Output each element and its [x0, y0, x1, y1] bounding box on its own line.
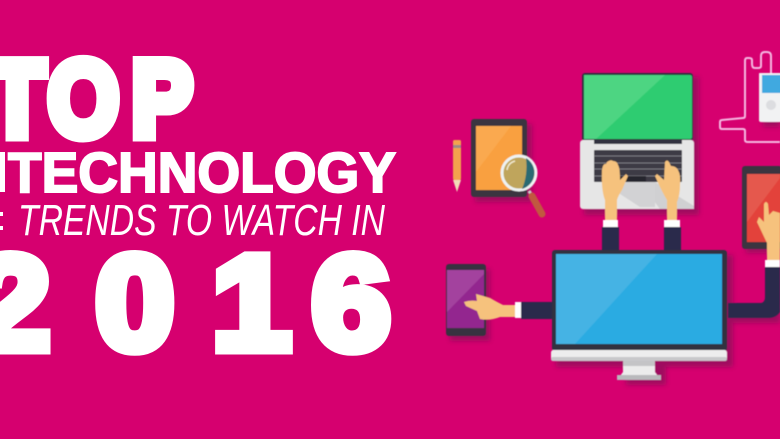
cropped letter fragments at left edge	[0, 152, 5, 230]
laptop	[580, 73, 694, 251]
mp3 player	[759, 73, 780, 122]
illustration shadows	[450, 77, 780, 385]
subtitle: trends to watch in: TRENDS TO WATCH IN	[18, 196, 385, 245]
keyboard	[594, 150, 682, 182]
title: TECHNOLOGY: TECHNOLOGY	[8, 141, 396, 205]
illustration: connected devices	[446, 52, 780, 385]
right arm reaching up to red tablet	[728, 202, 780, 318]
orange tablet	[471, 119, 527, 197]
mp3 player cable	[720, 52, 780, 142]
laptop screen	[582, 73, 693, 141]
left cuff and sleeve	[602, 220, 619, 251]
red tablet	[742, 166, 780, 249]
monitor	[551, 250, 727, 380]
left arm pointing at phone	[464, 294, 552, 320]
right hand	[655, 160, 680, 221]
right cuff and sleeve	[664, 220, 681, 251]
laptop base	[580, 140, 694, 209]
pencil	[453, 140, 461, 192]
phone	[446, 264, 486, 336]
left hand	[602, 160, 628, 221]
monitor chin	[551, 350, 727, 361]
monitor screen	[552, 250, 727, 351]
magnifying glass	[502, 156, 542, 214]
monitor stand	[617, 361, 661, 380]
